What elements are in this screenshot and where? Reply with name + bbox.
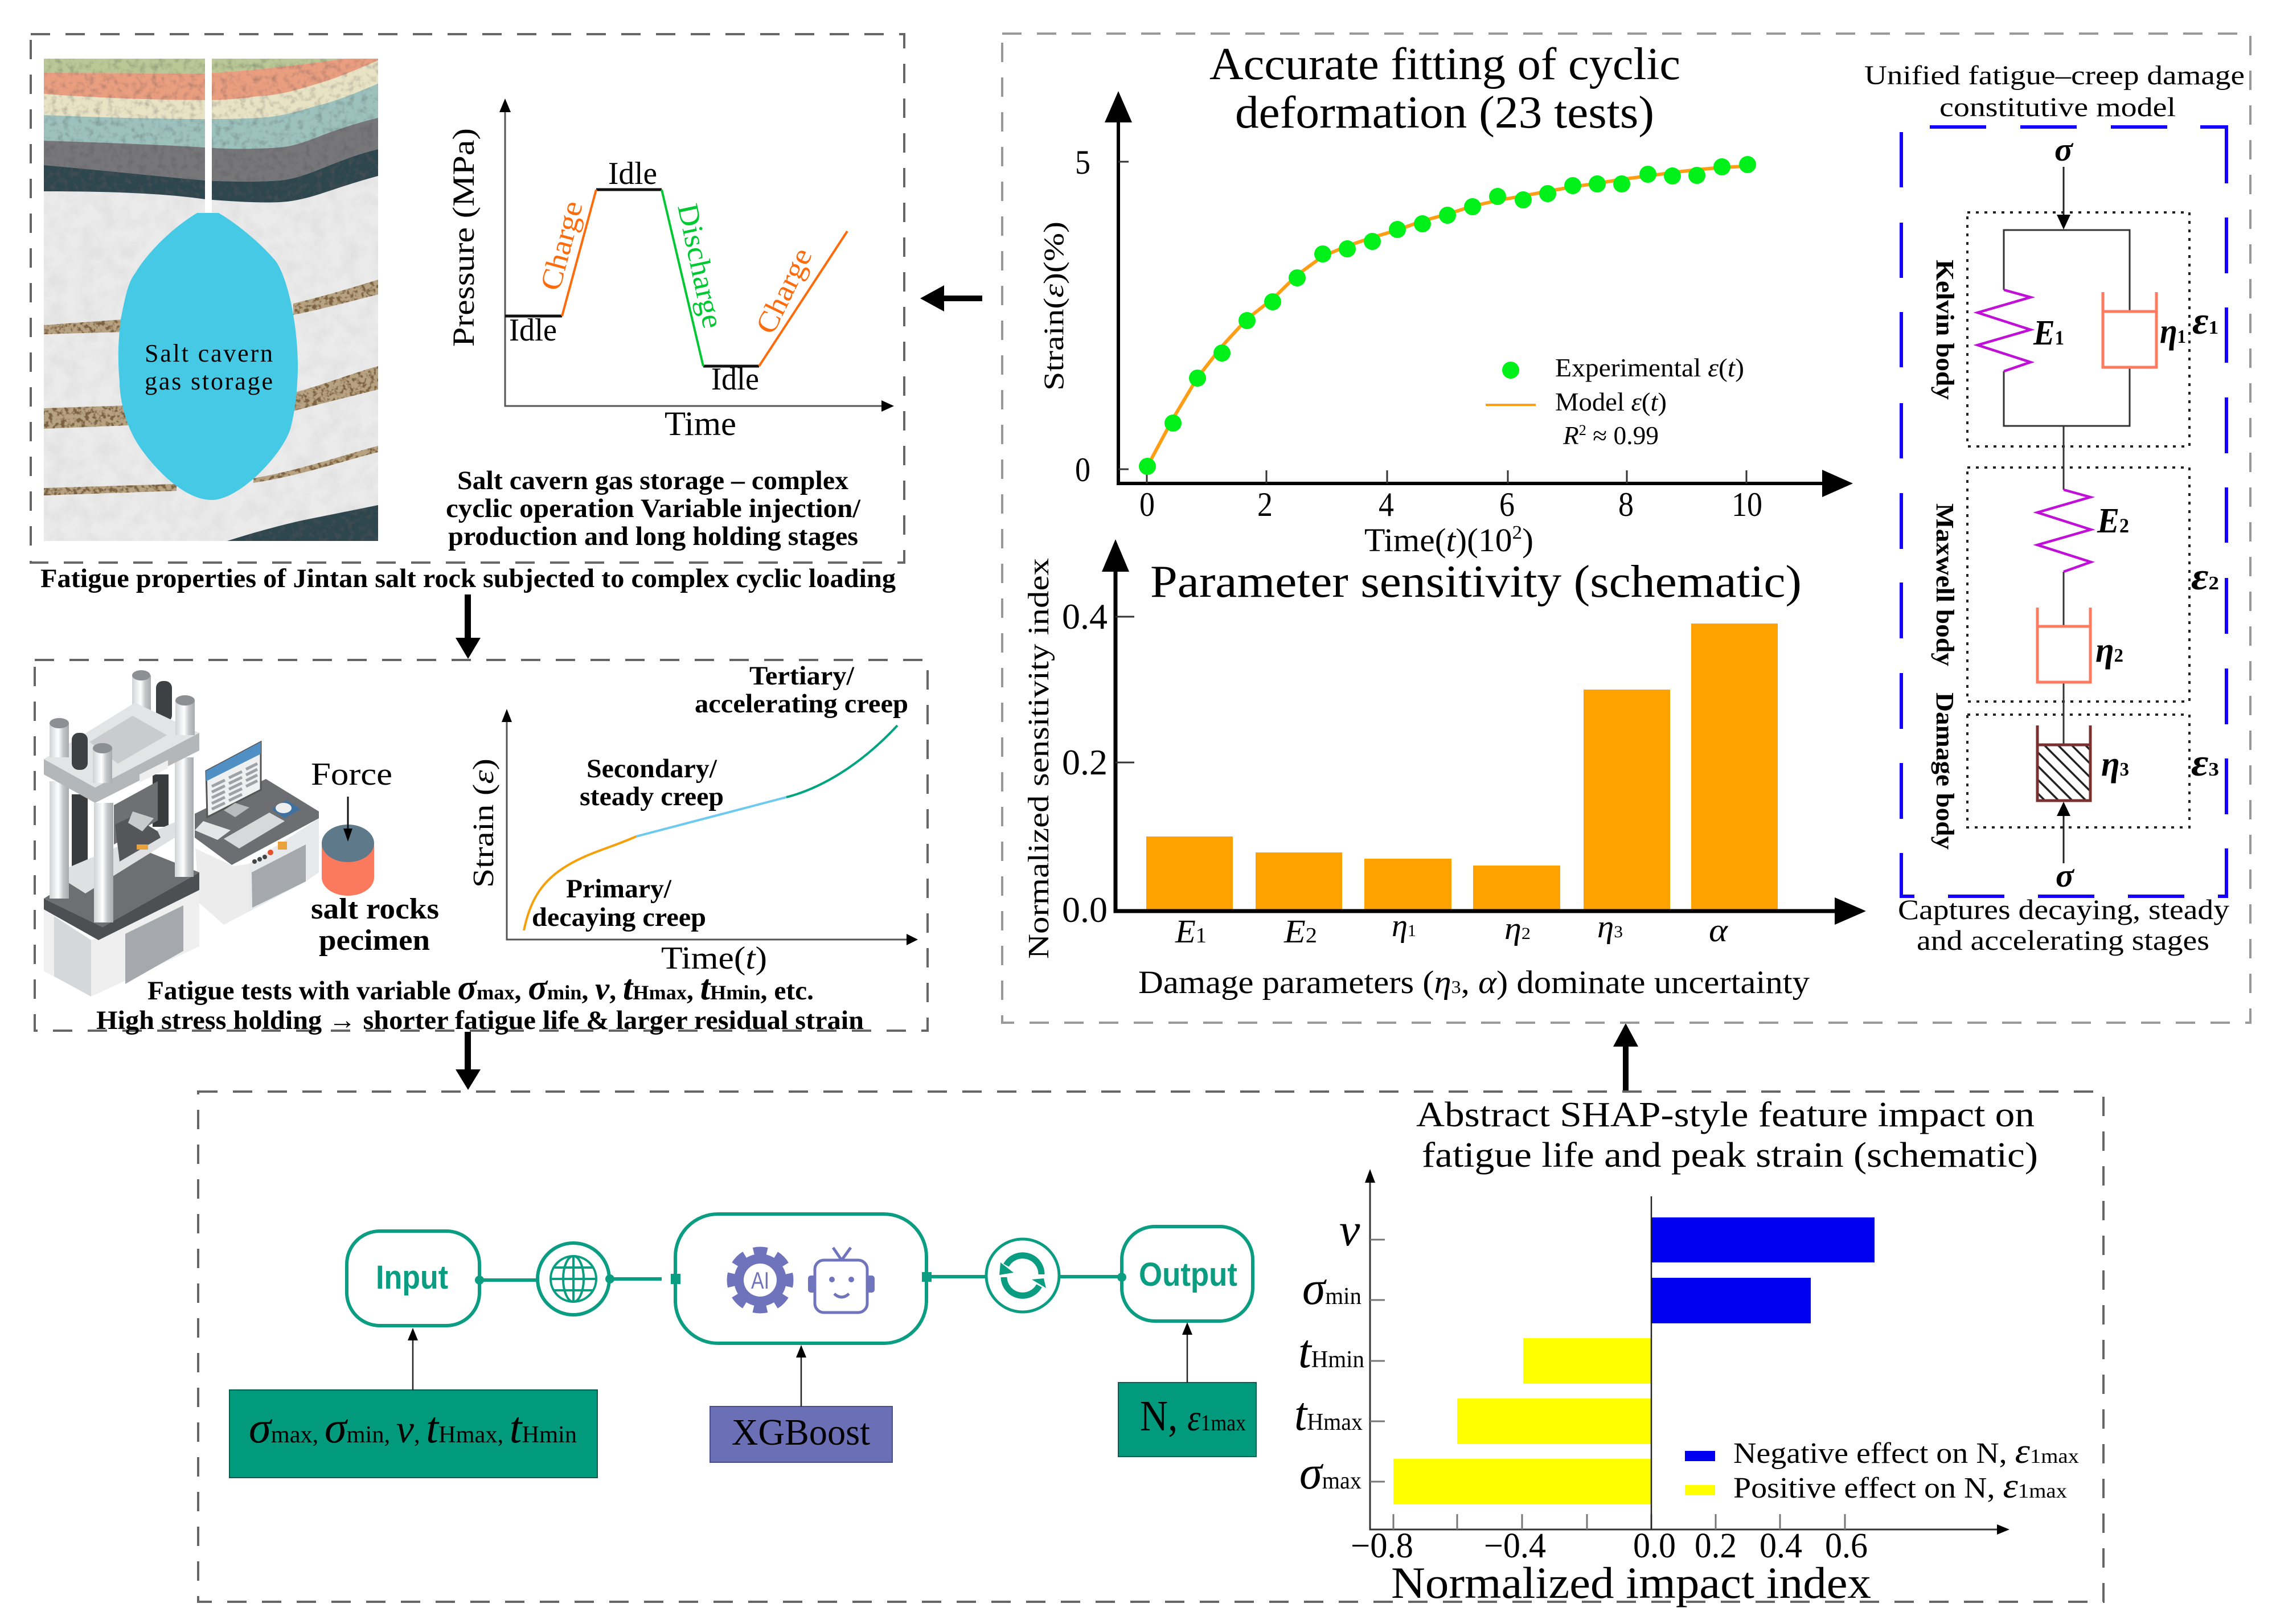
axis labels: 6 bbox=[1499, 486, 1515, 523]
illustration: testing machine bbox=[44, 670, 319, 996]
arrow: XGBoost to processor bbox=[796, 1345, 806, 1406]
Kelvin body: Kelvin body bbox=[1931, 260, 1959, 400]
title: Parameter sensitivity (schematic) bbox=[1150, 557, 1802, 607]
y labels: σmin bbox=[1302, 1262, 1361, 1315]
axis labels: 0.4 bbox=[1062, 596, 1108, 637]
panel: salt cavern operation bbox=[31, 34, 904, 563]
caption bbox=[1898, 893, 2229, 956]
Kelvin body bbox=[1931, 230, 2218, 490]
axis labels: 8 bbox=[1618, 486, 1634, 523]
title bbox=[1864, 60, 2245, 122]
title: Abstract SHAP-style feature impact on bbox=[1416, 1096, 2035, 1134]
caption: and accelerating stages bbox=[1917, 924, 2209, 956]
chart: creep curve: decaying creep bbox=[532, 903, 706, 932]
axis labels bbox=[1023, 558, 1729, 959]
chart: SHAP feature impact bbox=[1294, 1096, 2079, 1607]
x tick labels: 0.2 bbox=[1695, 1527, 1737, 1565]
title bbox=[1209, 39, 1680, 138]
Maxwell body: E2 bbox=[2097, 502, 2129, 540]
icon: refresh bbox=[986, 1239, 1059, 1312]
chart: pressure vs time: Discharge bbox=[671, 201, 729, 331]
box: output variables bbox=[1118, 1383, 1256, 1457]
node: input: Input bbox=[376, 1259, 448, 1296]
label: cavern name bbox=[145, 339, 273, 395]
y labels: v bbox=[1339, 1204, 1360, 1256]
node: output: Output bbox=[1139, 1256, 1237, 1293]
axis labels: η3 bbox=[1597, 909, 1623, 945]
base bbox=[44, 909, 91, 996]
caption: Captures decaying, steady bbox=[1898, 893, 2229, 925]
chart: creep curve bbox=[467, 661, 918, 976]
axes bbox=[1365, 1169, 2009, 1535]
columns bbox=[50, 781, 69, 899]
chart: cyclic deformation fit bbox=[1037, 39, 1853, 559]
label: cavern name: gas storage bbox=[145, 367, 273, 395]
caption: Damage parameters ( η3, α) dominate uncertainty bbox=[1138, 965, 1810, 1000]
node: input bbox=[347, 1231, 479, 1326]
axis labels: 10 bbox=[1732, 486, 1762, 523]
axis labels: 0 bbox=[1075, 451, 1090, 489]
text: test caption: High stress holding → shorter fatigue life & larger residual strain bbox=[96, 1006, 864, 1035]
axis labels: Normalized sensitivity index bbox=[1023, 558, 1055, 959]
Maxwell body bbox=[1931, 490, 2219, 745]
icon: robot bbox=[808, 1248, 875, 1313]
box: XGBoost bbox=[710, 1406, 892, 1462]
arrow: panel 4 to panel 1 bbox=[920, 285, 982, 311]
Maxwell body: Maxwell body bbox=[1931, 503, 1959, 666]
arrow: variables to input bbox=[408, 1328, 418, 1390]
axes bbox=[1105, 91, 1853, 497]
axis labels: 0 bbox=[1139, 486, 1155, 523]
axis labels: E1 bbox=[1175, 913, 1207, 950]
Damage body: Damage body bbox=[1931, 692, 1959, 850]
axis labels: 2 bbox=[1512, 522, 1522, 543]
axis labels: E2 bbox=[1283, 913, 1317, 950]
label: force: Force bbox=[311, 757, 392, 792]
legend: Model ε(t) bbox=[1555, 388, 1667, 416]
legend: ≈ 0.99 bbox=[1586, 421, 1659, 450]
axis labels: Strain(ε)(%) bbox=[1037, 222, 1069, 391]
Maxwell body: ε2 bbox=[2191, 555, 2219, 598]
axis labels: Time(t)(10 bbox=[1364, 522, 1511, 559]
text: operation caption: cyclic operation Variable injection/ bbox=[446, 494, 861, 523]
label: specimen name: salt rocks bbox=[311, 893, 439, 925]
title: Accurate fitting of cyclic bbox=[1209, 39, 1680, 89]
stratum: dark layer bbox=[44, 149, 378, 203]
node: AI processor bbox=[675, 1214, 926, 1343]
label: specimen name bbox=[311, 893, 439, 957]
Kelvin body: ε1 bbox=[2192, 299, 2218, 342]
stress bottom bbox=[2056, 802, 2075, 894]
text: test caption bbox=[96, 969, 864, 1035]
Damage body: ε3 bbox=[2191, 741, 2219, 784]
text: operation caption: production and long holding stages bbox=[448, 522, 858, 551]
Maxwell body: η2 bbox=[2095, 631, 2123, 670]
title bbox=[1416, 1096, 2038, 1175]
x tick labels bbox=[1351, 1527, 1868, 1565]
axis labels: 2 bbox=[1257, 486, 1273, 523]
icon: globe bbox=[538, 1243, 609, 1315]
box: XGBoost: XGBoost bbox=[732, 1412, 870, 1453]
legend bbox=[1486, 354, 1744, 450]
title: constitutive model bbox=[1939, 92, 2176, 122]
axes bbox=[1102, 539, 1866, 925]
chart: pressure vs time bbox=[446, 99, 894, 442]
diagram: constitutive model bbox=[1864, 60, 2245, 956]
spring E1 bbox=[1978, 290, 2031, 371]
legend bbox=[1685, 1432, 2079, 1506]
x tick labels: 0.4 bbox=[1760, 1527, 1802, 1565]
chart: parameter sensitivity bbox=[1023, 539, 1866, 1000]
stratum: grey layer bbox=[44, 118, 378, 182]
connectors: input to processor bbox=[475, 1274, 680, 1285]
legend: 2 bbox=[1579, 422, 1586, 438]
shape: salt cavern bbox=[118, 213, 298, 500]
legend: Positive effect on N, ε1max bbox=[1733, 1467, 2067, 1506]
connectors: processor to output bbox=[922, 1272, 1126, 1282]
node: output bbox=[1122, 1227, 1253, 1321]
chart: pressure vs time: Charge bbox=[535, 198, 589, 294]
axis labels: 5 bbox=[1075, 143, 1090, 181]
title: Unified fatigue–creep damage bbox=[1864, 60, 2245, 91]
stratum: green surface layer bbox=[44, 59, 378, 73]
panel: fatigue tests bbox=[35, 660, 928, 1035]
Damage body bbox=[1931, 692, 2219, 850]
legend: Experimental ε(t) bbox=[1555, 354, 1744, 382]
chart: creep curve: Secondary/ bbox=[587, 754, 717, 784]
x tick labels: 0.0 bbox=[1633, 1527, 1676, 1565]
model curve bbox=[1147, 166, 1748, 466]
strata layers bbox=[44, 59, 378, 541]
arrow: panel 1 to panel 2 bbox=[456, 594, 481, 659]
box: output variables: N, ε1max bbox=[1140, 1392, 1246, 1440]
panel: model results bbox=[1002, 34, 2250, 1023]
chart: creep curve: Time(t) bbox=[661, 941, 767, 976]
legend: R bbox=[1562, 421, 1579, 450]
y labels bbox=[1294, 1204, 1364, 1499]
spring E2 bbox=[2037, 490, 2091, 572]
icon: salt rock specimen bbox=[322, 825, 374, 896]
stratum: cream layer bbox=[44, 60, 378, 119]
y labels: tHmax bbox=[1294, 1388, 1363, 1441]
x axis title: Normalized impact index bbox=[1391, 1558, 1871, 1607]
x tick labels: −0.8 bbox=[1351, 1527, 1413, 1565]
title: fatigue life and peak strain (schematic) bbox=[1422, 1136, 2038, 1175]
heading: fatigue properties: Fatigue properties of Jintan salt rock subjected to complex cyclic loading bbox=[40, 564, 896, 593]
chart: creep curve: accelerating creep bbox=[695, 689, 908, 719]
text: operation caption bbox=[446, 466, 861, 551]
text: operation caption: Salt cavern gas storage – complex bbox=[457, 466, 848, 495]
label: specimen name: pecimen bbox=[319, 924, 430, 957]
panel: machine learning workflow bbox=[198, 1092, 2103, 1607]
chart: creep curve: Strain (ε) bbox=[467, 758, 500, 888]
chart: pressure vs time: Idle bbox=[608, 156, 657, 191]
icon: AI gear: AI bbox=[751, 1267, 769, 1294]
arrow: force bbox=[343, 797, 352, 842]
bars: negative effect bbox=[1651, 1217, 1875, 1323]
Kelvin body: η1 bbox=[2160, 312, 2186, 351]
y labels: tHmin bbox=[1298, 1325, 1364, 1378]
frame rear bbox=[132, 675, 151, 711]
bars: positive effect bbox=[1393, 1338, 1651, 1504]
x tick labels: −0.4 bbox=[1484, 1527, 1546, 1565]
label: cavern name: Salt cavern bbox=[145, 339, 273, 367]
axis labels: ) bbox=[1522, 522, 1533, 559]
chart: pressure vs time: Time bbox=[665, 405, 736, 442]
box: input variables bbox=[229, 1390, 597, 1478]
title: deformation (23 tests) bbox=[1235, 88, 1654, 138]
crosshead bbox=[44, 733, 199, 803]
axis labels: η1 bbox=[1392, 908, 1416, 944]
box: input variables: σmax, σmin, v, tHmax, tHmin bbox=[249, 1402, 577, 1452]
axis labels: 4 bbox=[1379, 486, 1394, 523]
chart: creep curve: steady creep bbox=[580, 782, 724, 811]
chart: creep curve: Tertiary/ bbox=[749, 661, 855, 691]
experimental points bbox=[1139, 156, 1756, 475]
bars bbox=[1146, 624, 1778, 911]
icon: AI gear bbox=[731, 1250, 790, 1310]
axis labels: 0.0 bbox=[1062, 889, 1108, 930]
chart: pressure vs time: Charge bbox=[750, 243, 819, 339]
dashpot eta1 bbox=[2103, 292, 2156, 367]
blue dashed frame bbox=[1901, 127, 2226, 896]
console bbox=[195, 742, 319, 925]
chart: pressure vs time: Idle bbox=[509, 313, 557, 348]
x tick labels: 0.6 bbox=[1825, 1527, 1868, 1565]
Damage body: η3 bbox=[2101, 745, 2129, 784]
Kelvin body: E1 bbox=[2033, 314, 2064, 352]
legend: Negative effect on N, ε1max bbox=[1733, 1432, 2079, 1471]
stratum: teal layer bbox=[44, 84, 378, 149]
y labels: σmax bbox=[1299, 1446, 1361, 1499]
illustration: geological cross-section with salt cavern bbox=[44, 59, 378, 541]
stratum: brown interlayers bbox=[44, 280, 378, 495]
pipe: wellbore bbox=[205, 59, 212, 214]
crossbar and grips bbox=[114, 781, 158, 844]
chart: creep curve: Primary/ bbox=[566, 874, 672, 904]
axis labels: η2 bbox=[1504, 911, 1531, 946]
chart: pressure vs time: Pressure (MPa) bbox=[446, 128, 481, 347]
arrow: panel 3 to panel 4 bbox=[1613, 1023, 1638, 1090]
chart: pressure vs time: Idle bbox=[711, 362, 759, 397]
dotted boxes bbox=[1967, 212, 2189, 827]
stratum: dark lower corner bbox=[227, 505, 378, 541]
axis labels: 0.2 bbox=[1062, 742, 1108, 782]
arrow: outputs to output node bbox=[1182, 1322, 1192, 1383]
dashpot eta2 bbox=[2037, 608, 2090, 682]
stress top: σ bbox=[2054, 131, 2074, 168]
text: test caption: Fatigue tests with variable σmax, σmin, v, tHmax, tHmin, etc. bbox=[147, 969, 814, 1007]
arrow: panel 2 to panel 3 bbox=[456, 1032, 481, 1090]
stress top bbox=[2054, 131, 2074, 229]
axis labels: α bbox=[1709, 912, 1729, 949]
axis labels bbox=[1037, 143, 1762, 559]
stratum: salmon layer bbox=[44, 59, 378, 100]
stress bottom: σ bbox=[2056, 857, 2075, 894]
